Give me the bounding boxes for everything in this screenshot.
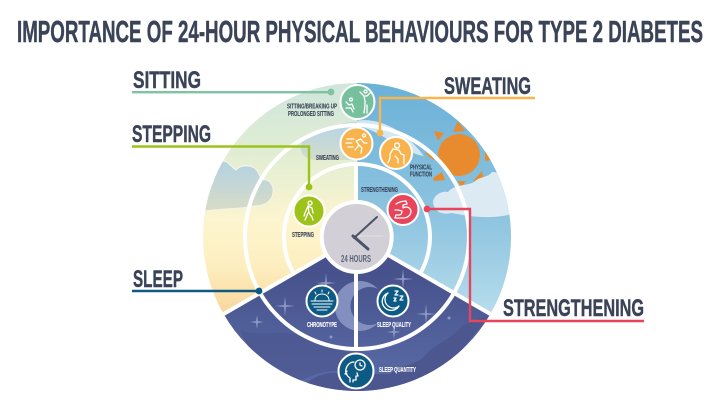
label: sitting: PROLONGED SITTING <box>288 111 334 118</box>
clock hands <box>353 217 383 249</box>
icon: strengthening <box>388 194 418 225</box>
icon: physical function <box>380 137 412 169</box>
night hills left <box>242 332 350 380</box>
label: chronotype: CHRONOTYPE <box>307 322 337 329</box>
panel: night sky <box>224 237 490 391</box>
label: sweating: SWEATING <box>316 155 339 162</box>
panel: daytime left sky <box>203 83 357 314</box>
cloud: upper middle right <box>350 120 424 156</box>
icon: stepping <box>294 196 324 226</box>
label: physical function: FUNCTION <box>410 172 432 178</box>
clock label: 24 HOURS <box>341 254 371 265</box>
icon: sweating <box>340 128 372 160</box>
cloud: left <box>200 161 273 212</box>
heading: strengthening: STRENGTHENING <box>503 295 644 322</box>
connector: sweating <box>377 98 535 136</box>
label: sleep quality: SLEEP QUALITY <box>377 322 411 329</box>
label: physical function: PHYSICAL <box>410 164 432 172</box>
connector: sleep <box>132 288 262 294</box>
icon: chronotype <box>306 286 338 316</box>
panel: daytime right sky <box>357 83 511 314</box>
cloud: upper middle <box>301 122 360 160</box>
clock in head <box>355 360 365 370</box>
connector: strengthening <box>424 206 644 321</box>
white rings and dividers <box>224 125 490 349</box>
icon: sleep quality <box>378 286 408 316</box>
icon: sitting <box>340 85 374 119</box>
stars <box>250 269 450 339</box>
connector: stepping <box>132 146 312 190</box>
heading: sleep: SLEEP <box>133 266 183 293</box>
moon <box>335 281 378 331</box>
icon: sleep quantity <box>338 354 374 388</box>
heading: stepping: STEPPING <box>132 121 211 148</box>
night hills <box>307 322 483 391</box>
label: sleep quantity: SLEEP QUANTITY <box>379 367 416 374</box>
sun with rays <box>424 121 492 188</box>
label: stepping: STEPPING <box>292 232 314 239</box>
label: sitting <box>287 104 337 118</box>
label: physical function <box>410 164 432 178</box>
wheel diagram <box>200 83 512 391</box>
label: sitting: SITTING/BREAKING UP <box>287 104 337 110</box>
cloud: right white <box>433 172 512 217</box>
heading: sitting: SITTING <box>133 67 201 94</box>
label: strengthening: STRENGTHENING <box>361 187 398 194</box>
heading: sweating: SWEATING <box>444 73 531 100</box>
connector: sitting <box>132 89 334 95</box>
clock <box>322 202 392 272</box>
